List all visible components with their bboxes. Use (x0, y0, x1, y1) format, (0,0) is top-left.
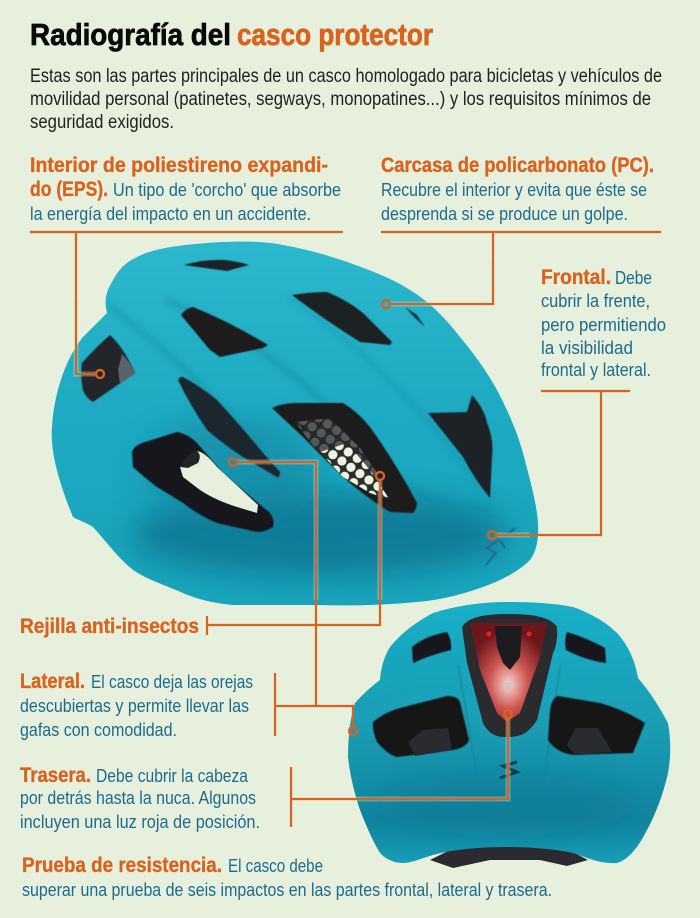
text: trasera: Trasera. (20, 764, 91, 787)
icon: upper left vent (412, 632, 451, 663)
text: carcasa PC (381, 154, 654, 224)
text: frontal: Debe (615, 267, 652, 288)
icon: lower left vent (373, 696, 469, 757)
icon: center mesh vent (272, 403, 417, 513)
icon: side slit (178, 377, 280, 477)
text: trasera: por detrás hasta la nuca. Algunos (20, 787, 256, 808)
text: frontal: pero permitiendo (541, 314, 666, 335)
text: frontal (541, 266, 666, 380)
text: interior EPS: la energía del impacto en un accidente. (30, 203, 311, 224)
text: frontal: Frontal. (541, 266, 611, 289)
text: interior EPS (30, 154, 341, 224)
text: interior EPS: do (EPS). (30, 178, 108, 201)
text: prueba de resistencia (22, 854, 552, 900)
text: trasera: incluyen una luz roja de posición. (20, 811, 260, 832)
icon: inner padding (430, 840, 588, 868)
text: lateral (20, 670, 253, 740)
icon: rear logo (500, 762, 517, 778)
text: carcasa PC: desprenda si se produce un golpe. (381, 203, 628, 224)
icon: rear view helmet (340, 595, 680, 870)
leader: EPS (30, 232, 343, 378)
title (30, 17, 433, 52)
title: Radiografía del (30, 17, 231, 52)
text: carcasa PC: Recubre el interior y evita que éste se (381, 179, 647, 200)
icon: rear light (462, 614, 557, 737)
title: casco protector (237, 17, 433, 52)
icon: upper right vent (565, 632, 606, 663)
text: rejilla: Rejilla anti-insectos (20, 615, 199, 638)
icon: side view helmet (40, 235, 550, 615)
text: frontal: cubrir la frente, (541, 290, 650, 311)
leader: rejilla (207, 472, 384, 635)
text: interior EPS: Interior de poliestireno expandi- (30, 154, 328, 177)
leader: lateral (229, 458, 357, 736)
icon: front vent (428, 395, 492, 498)
leader: frontal (488, 391, 630, 539)
icon: top vent (184, 260, 249, 271)
icon: ear vent (132, 432, 274, 532)
icon: lower right vent (548, 696, 645, 755)
icon: rear vent (81, 335, 135, 402)
text: frontal: la visibilidad (541, 337, 633, 358)
intro text (30, 66, 662, 133)
icon: upper right vent (292, 292, 392, 345)
intro text: seguridad exigidos. (30, 112, 174, 133)
leader: carcasa (381, 232, 661, 308)
text: lateral: gafas con comodidad. (20, 719, 177, 740)
text: trasera: Debe cubrir la cabeza (96, 765, 249, 786)
text: carcasa PC: Carcasa de policarbonato (PC). (381, 154, 654, 177)
icon: helmet logo (486, 528, 515, 565)
icon: small vent (405, 307, 425, 327)
text: frontal: frontal y lateral. (541, 359, 651, 380)
leader: trasera (291, 710, 512, 827)
text: lateral: Lateral. (20, 670, 85, 693)
text: interior EPS: Un tipo de 'corcho' que absorbe (113, 179, 341, 200)
text: lateral: El casco deja las orejas (91, 671, 253, 692)
icon: upper middle vent (181, 307, 268, 357)
text: lateral: descubiertas y permite llevar las (20, 695, 249, 716)
text: prueba de resistencia: El casco debe (228, 855, 323, 876)
text: prueba de resistencia: Prueba de resistencia. (22, 854, 222, 877)
text: trasera (20, 764, 260, 832)
text: prueba de resistencia: superar una prueba de seis impactos en las partes frontal, lateral y trasera. (22, 879, 552, 900)
